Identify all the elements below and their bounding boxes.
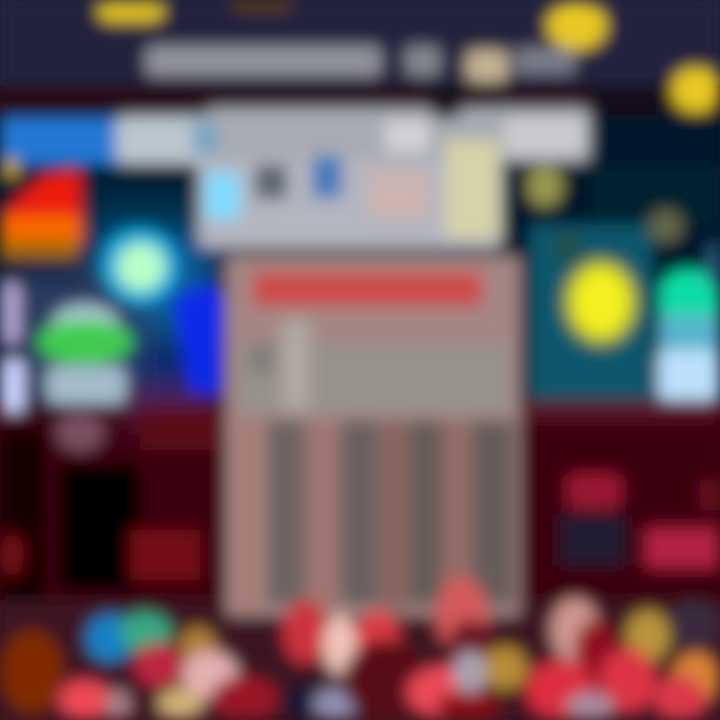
right decorations [530, 165, 720, 402]
ceiling lights [98, 0, 720, 112]
icon: yellow circle [564, 259, 638, 345]
right lower area [525, 400, 720, 568]
icon: left edge shapes [0, 283, 24, 412]
blue glow behind left icons [10, 190, 220, 425]
panel: teal [530, 225, 652, 400]
main heading [116, 84, 590, 248]
panel: central table [226, 256, 520, 616]
left decorations [0, 158, 224, 452]
icon: red and orange chart [0, 158, 82, 258]
panel: dark teal upper [590, 165, 720, 225]
icon: small lights [553, 209, 683, 263]
table header bar [253, 272, 482, 306]
confetti crowd [0, 577, 720, 720]
icon: green and white dome right [658, 245, 720, 402]
icon: green and white dome [37, 304, 133, 452]
table columns [238, 420, 514, 610]
left blue band [0, 118, 130, 164]
heading spot [527, 165, 563, 207]
table heading row [238, 320, 510, 413]
icon: cyan glow [102, 228, 178, 304]
title line [146, 46, 575, 82]
icon: blue block [172, 282, 224, 394]
left dark lower area [0, 410, 220, 600]
